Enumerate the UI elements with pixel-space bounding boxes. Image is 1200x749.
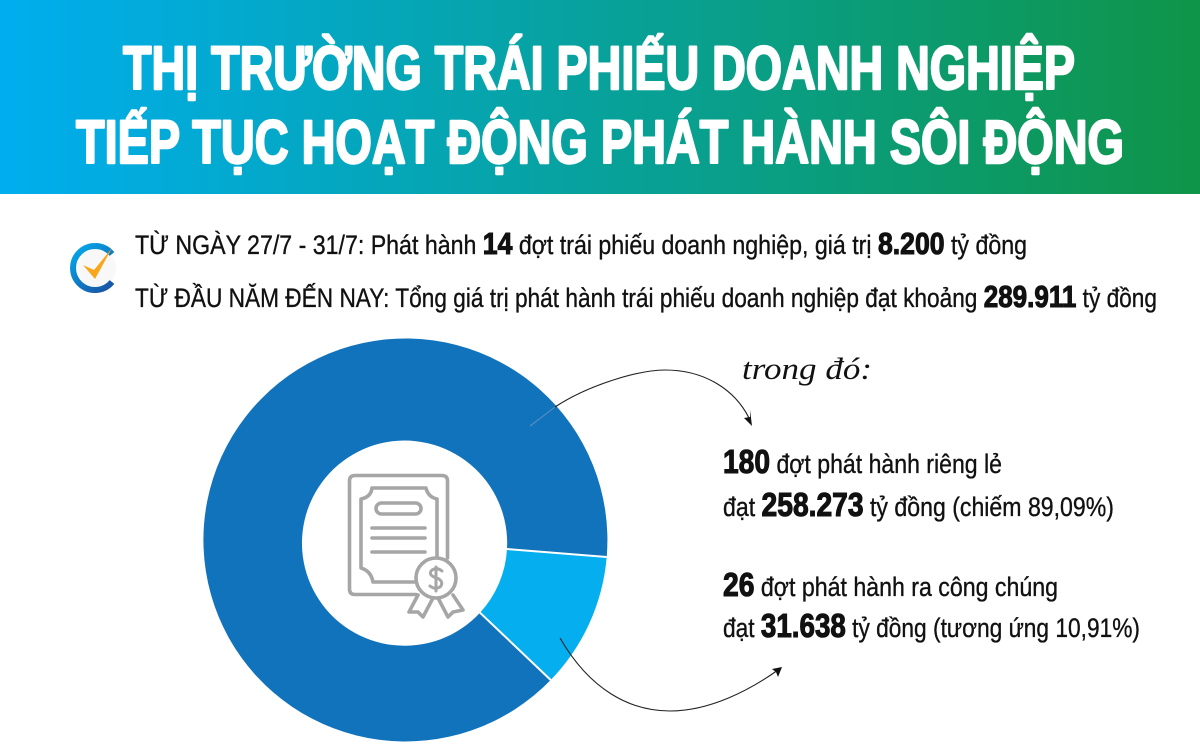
callout: public offering: 26 đợt phát hành ra công chúng xyxy=(723,566,1058,603)
header banner xyxy=(0,0,1200,194)
weekly summary: TỪ NGÀY 27/7 - 31/7: Phát hành 14 đợt trái phiếu doanh nghiệp, giá trị 8.200 tỷ đồng xyxy=(135,226,1027,261)
segment: private placement 89.09% xyxy=(203,338,607,741)
arrow: to private placement xyxy=(530,370,752,426)
script label: trong đó: xyxy=(742,351,872,386)
callout: private placement xyxy=(723,443,1114,523)
title xyxy=(76,34,1124,176)
callout: public offering: đạt 31.638 tỷ đồng (tương ứng 10,91%) xyxy=(723,607,1140,644)
summary text xyxy=(135,226,1157,314)
icon: bond certificate xyxy=(350,476,463,617)
callout: private placement: đạt 258.273 tỷ đồng (chiếm 89,09%) xyxy=(723,486,1114,523)
callout: public offering xyxy=(723,566,1140,644)
year-to-date summary: TỪ ĐẦU NĂM ĐẾN NAY: Tổng giá trị phát hành trái phiếu doanh nghiệp đạt khoảng 289.911 tỷ đồng xyxy=(135,279,1157,314)
callout: private placement: 180 đợt phát hành riêng lẻ xyxy=(723,443,1002,480)
donut chart xyxy=(203,338,607,741)
icon: check logo xyxy=(73,246,116,290)
segment: public offering 10.91% xyxy=(480,549,607,680)
arrow: to public offering xyxy=(560,638,782,711)
